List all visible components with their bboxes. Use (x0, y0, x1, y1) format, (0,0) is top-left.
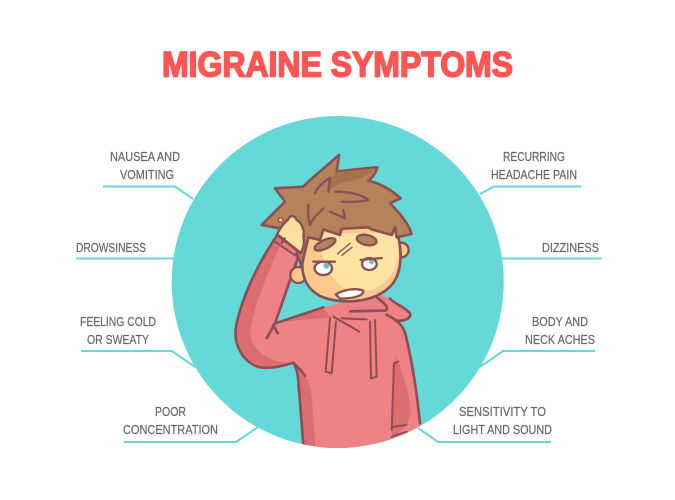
mouth (336, 289, 363, 299)
face (302, 220, 401, 301)
hand (277, 216, 304, 253)
label: dizziness (502, 240, 602, 258)
ears (290, 243, 409, 283)
label: poor concentration: POOR (155, 404, 186, 419)
head (262, 155, 412, 301)
label: feeling cold or sweaty: OR SWEATY (87, 332, 149, 347)
label: sensitivity to light and sound: LIGHT AND SOUND (453, 422, 552, 437)
character: boy with migraine (235, 155, 423, 453)
forehead wrinkles (337, 243, 352, 255)
cuff (273, 234, 301, 257)
label: nausea and vomiting: VOMITING (120, 167, 174, 182)
label: body and neck aches: BODY AND (532, 314, 588, 329)
right eye (361, 258, 382, 270)
label: dizziness: DIZZINESS (542, 240, 599, 255)
label: feeling cold or sweaty (80, 314, 195, 367)
label: body and neck aches: NECK ACHES (525, 332, 595, 347)
teal circle background (172, 116, 504, 448)
label: recurring headache pain: RECURRING (503, 149, 565, 164)
label: recurring headache pain: HEADACHE PAIN (491, 167, 577, 182)
title: MIGRAINE SYMPTOMS (162, 46, 513, 84)
label: nausea and vomiting: NAUSEA AND (110, 149, 180, 164)
left eye (313, 262, 335, 275)
hair (262, 155, 412, 266)
label: nausea and vomiting (103, 149, 193, 199)
label: body and neck aches (480, 314, 595, 367)
brows (313, 233, 377, 253)
label: drowsiness: DROWSINESS (76, 240, 146, 255)
label: sensitivity to light and sound (418, 404, 552, 442)
label: poor concentration (123, 404, 258, 442)
label: recurring headache pain (480, 149, 581, 194)
label: sensitivity to light and sound: SENSITIVITY TO (459, 404, 546, 419)
hoodie (235, 233, 423, 453)
label: feeling cold or sweaty: FEELING COLD (80, 314, 156, 329)
label: poor concentration: CONCENTRATION (123, 422, 218, 437)
